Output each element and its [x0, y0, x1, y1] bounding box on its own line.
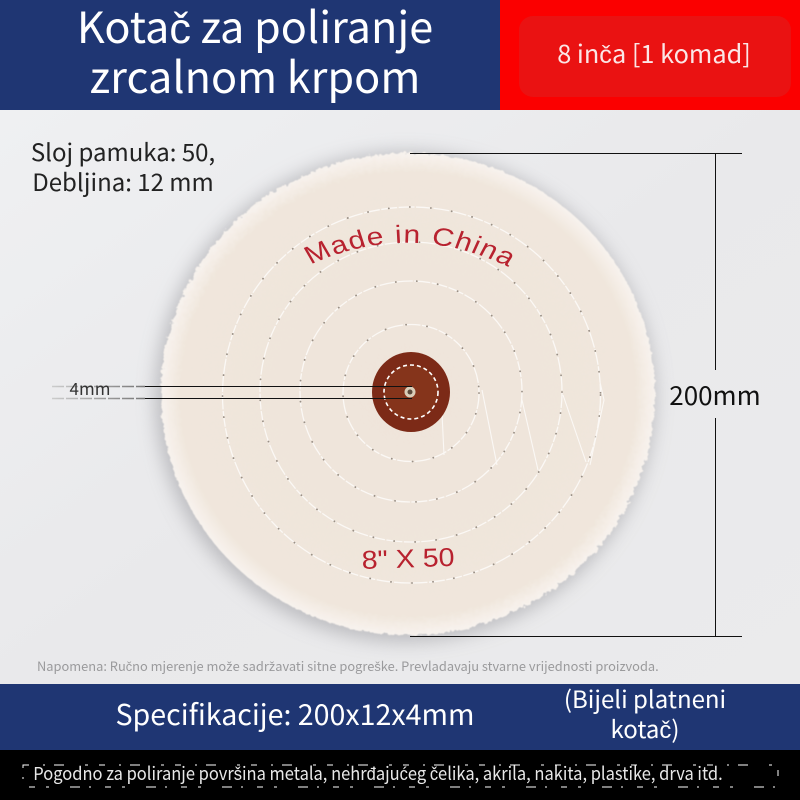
wheel shadow: [155, 152, 655, 642]
callout: layer count and thickness: Sloj pamuka: 50,: [31, 133, 215, 168]
stitch rings: [222, 207, 600, 583]
usage text: Pogodno za poliranje površina metala, nehrđajućeg čelika, akrila, nakita, plastike, drva itd.: [33, 759, 723, 785]
dimension: 4mm hole: [52, 375, 412, 400]
printed text: Made in China: Made in China: [304, 224, 512, 267]
header panel: size badge: [500, 0, 800, 110]
stitch holes: [222, 207, 600, 583]
usage bar: [0, 750, 800, 800]
printed text: 8 x 50: 8" X 50: [361, 542, 455, 575]
note: Napomena: Ručno mjerenje može sadržavati sitne pogreške. Prevladavaju stvarne vrijednosti proizvoda.: [37, 656, 659, 675]
leather hub: [372, 352, 450, 432]
photo background: [0, 110, 800, 684]
header panel: title: [0, 0, 500, 110]
usage frame: [23, 765, 778, 787]
header panel: size badge: 8 inča [1 komad]: [557, 35, 751, 71]
material text: kotač): [611, 710, 679, 745]
callout: layer count and thickness: [31, 133, 215, 198]
polishing wheel photo: [146, 144, 663, 650]
dimension: 200mm diameter: [410, 153, 761, 637]
dimension: 200mm diameter: 200mm: [669, 376, 761, 413]
title: zrcalnom krpom: [90, 44, 420, 106]
wheel fluffy body: [161, 153, 655, 635]
material text: (Bijeli platneni: [564, 680, 726, 715]
specification bar: [0, 680, 800, 750]
title: [77, 0, 433, 106]
dimension: 4mm hole: 4mm: [70, 375, 110, 400]
specification text: Specifikacije: 200x12x4mm: [116, 693, 474, 734]
callout: layer count and thickness: Debljina: 12 mm: [32, 163, 214, 198]
zigzag thread: [441, 382, 604, 470]
material text: [564, 680, 726, 745]
